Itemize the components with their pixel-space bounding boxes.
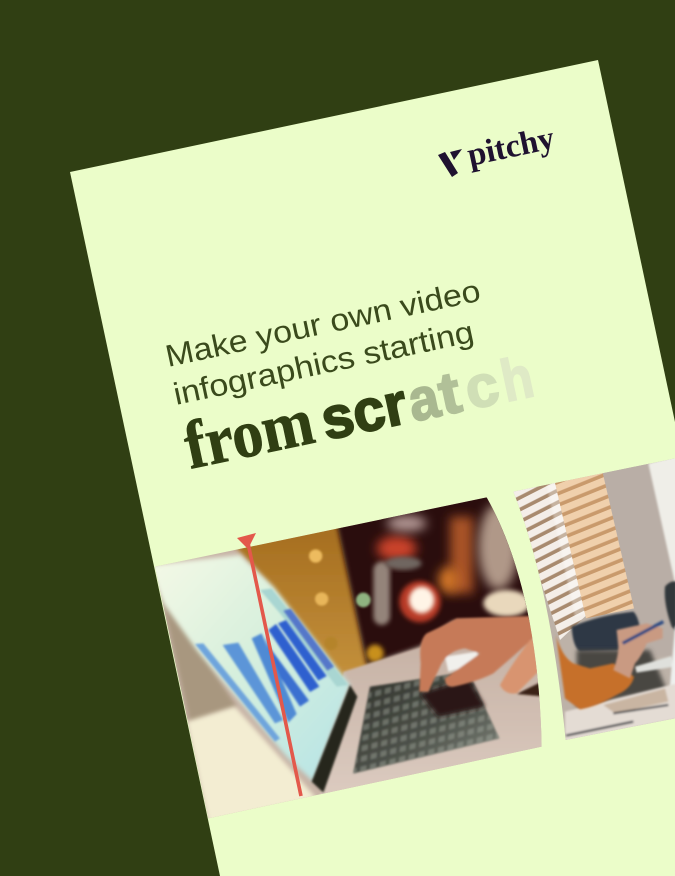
- heading emphasis: from scratch: c: [459, 351, 505, 422]
- monitor edge: [665, 581, 675, 632]
- heading: [162, 273, 539, 484]
- backdrop: orange wall: [234, 528, 370, 676]
- blinds: bright edge: [547, 483, 586, 617]
- chair: [572, 612, 642, 652]
- heading emphasis: from scratch: a: [402, 363, 446, 434]
- heading line 1: Make your own video: [162, 273, 483, 374]
- playhead: red marker: [237, 533, 301, 796]
- photo: person holding pen: [514, 458, 675, 740]
- keyboard: [353, 672, 499, 773]
- wall: [602, 464, 650, 474]
- photo: laptop with charts: [155, 498, 542, 818]
- bokeh lights: [309, 503, 530, 662]
- desk: [320, 647, 553, 797]
- laptop screen: [150, 555, 350, 782]
- laptop hinge bezel: [312, 685, 357, 793]
- white column: [648, 455, 675, 583]
- heading emphasis: from scratch: scr: [315, 370, 413, 453]
- chart bars on screen: [195, 609, 334, 742]
- dark background objects: [577, 650, 667, 707]
- icon: pitchy mark: [438, 149, 462, 177]
- foreground left: blurred objects: [160, 590, 237, 723]
- heading line 2: infographics starting: [170, 314, 477, 412]
- orange sleeve: [556, 635, 634, 709]
- heading emphasis: from scratch: [177, 336, 539, 484]
- heading emphasis: from scratch: t: [432, 359, 467, 428]
- hand on keyboard: [419, 616, 545, 697]
- logo: pitchy: [438, 120, 558, 177]
- heading emphasis: from scratch: h: [495, 344, 539, 415]
- desk and notebooks: [565, 683, 675, 742]
- backdrop: dark room: [334, 498, 530, 665]
- screen glare wedge: [260, 588, 348, 687]
- blinds: shaded: [512, 483, 587, 640]
- hand with pen: [613, 622, 663, 678]
- logo wordmark: pitchy: [464, 120, 558, 174]
- blinds: lit: [555, 473, 634, 618]
- heading emphasis: from scratch: from: [177, 382, 320, 484]
